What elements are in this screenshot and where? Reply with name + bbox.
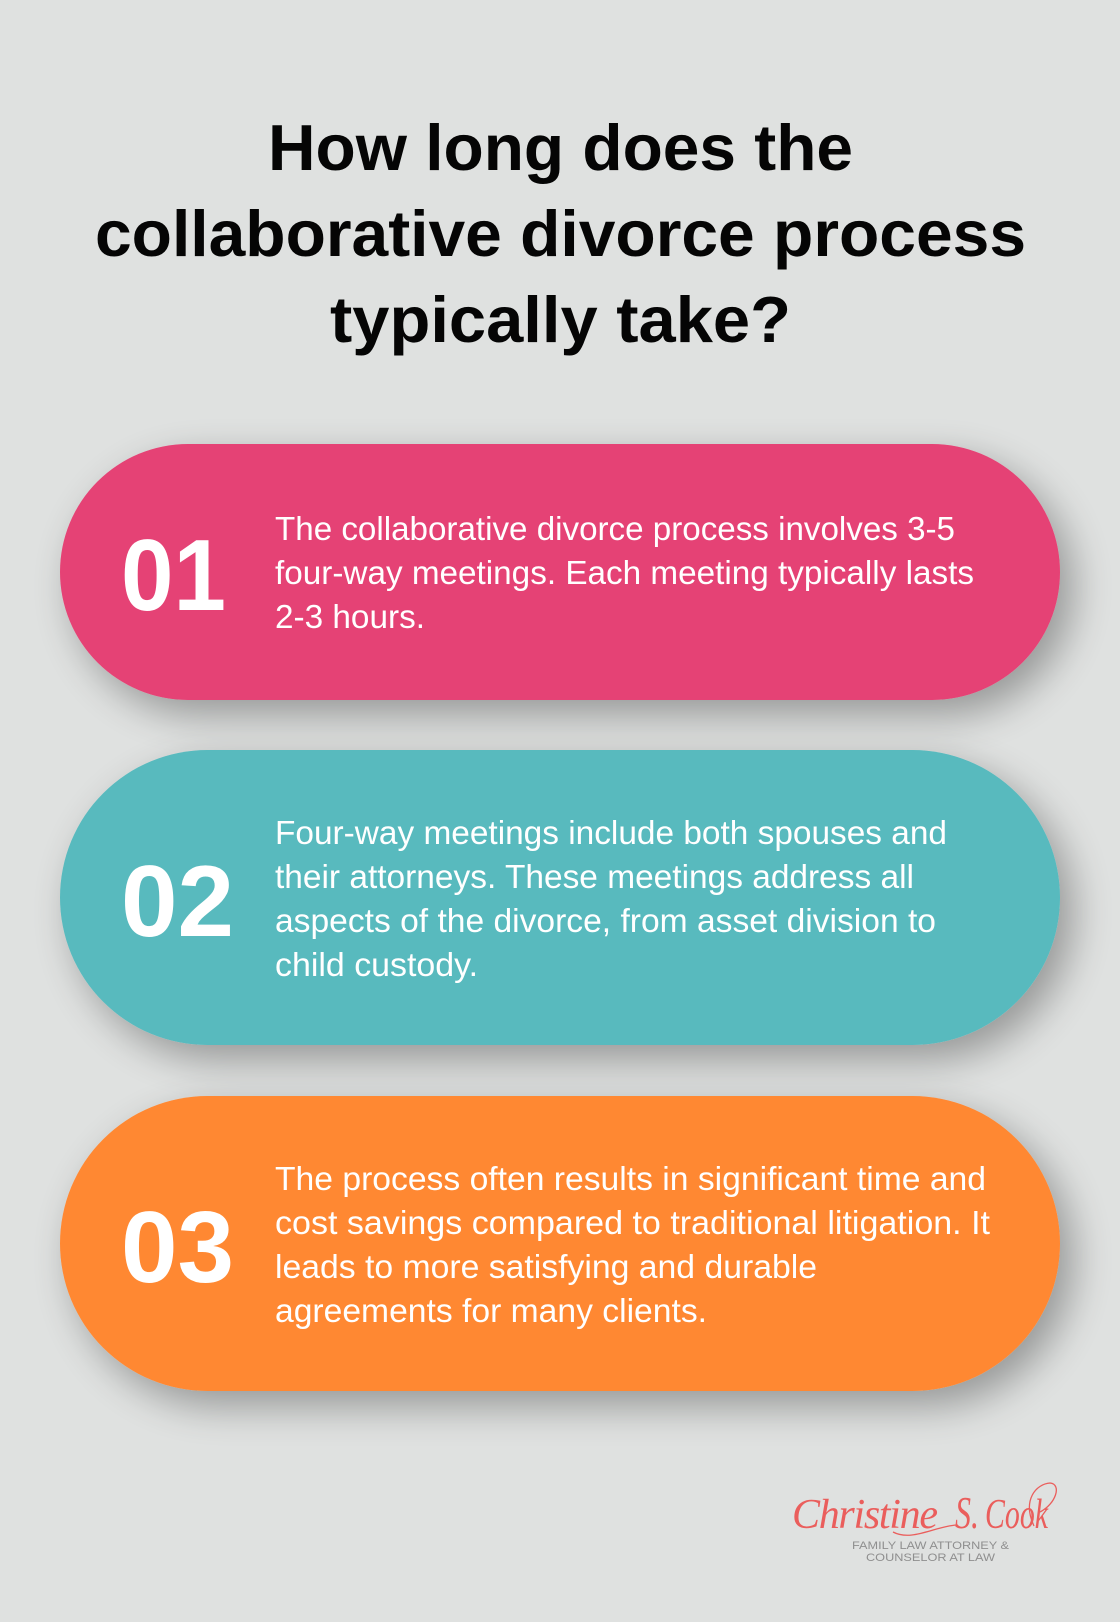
pill background pink <box>60 444 1060 700</box>
title: collaborative divorce process <box>95 197 1026 270</box>
panel: step 03 <box>60 1096 1060 1391</box>
step 02 text: aspects of the divorce, from asset division to <box>275 902 936 939</box>
logo: Christine S. Cook <box>792 1483 1056 1564</box>
step 01 text: four-way meetings. Each meeting typically lasts <box>275 554 974 591</box>
step 01 text <box>275 510 974 635</box>
pill background orange <box>60 1096 1060 1391</box>
step 01 text: 2-3 hours. <box>275 598 425 635</box>
step 03 text: agreements for many clients. <box>275 1292 707 1329</box>
pill background teal <box>60 750 1060 1045</box>
logo: Christine S. Cook: COUNSELOR AT LAW <box>866 1552 996 1564</box>
step 03 text: cost savings compared to traditional litigation. It <box>275 1204 990 1241</box>
step 01 text: The collaborative divorce process involves 3-5 <box>275 510 955 547</box>
step 03 text <box>275 1160 990 1329</box>
step 02 text <box>275 814 947 983</box>
panel: step 01 <box>60 444 1060 700</box>
number 03: 03 <box>121 1192 234 1304</box>
step 02 text: their attorneys. These meetings address all <box>275 858 914 895</box>
logo: Christine S. Cook: FAMILY LAW ATTORNEY & <box>852 1540 1010 1552</box>
panel: step 02 <box>60 750 1060 1045</box>
step 02 text: Four-way meetings include both spouses and <box>275 814 947 851</box>
title: How long does the <box>268 111 853 184</box>
step 03 text: The process often results in significant time and <box>275 1160 986 1197</box>
number 02: 02 <box>121 846 234 958</box>
logo: Christine S. Cook: Christine <box>792 1492 938 1538</box>
logo: Christine S. Cook: S. <box>955 1487 979 1538</box>
step 03 text: leads to more satisfying and durable <box>275 1248 817 1285</box>
title <box>95 111 1026 356</box>
number 01: 01 <box>121 520 226 632</box>
title: typically take? <box>330 283 791 356</box>
logo: Christine S. Cook: Cook <box>985 1492 1049 1538</box>
step 02 text: child custody. <box>275 946 478 983</box>
